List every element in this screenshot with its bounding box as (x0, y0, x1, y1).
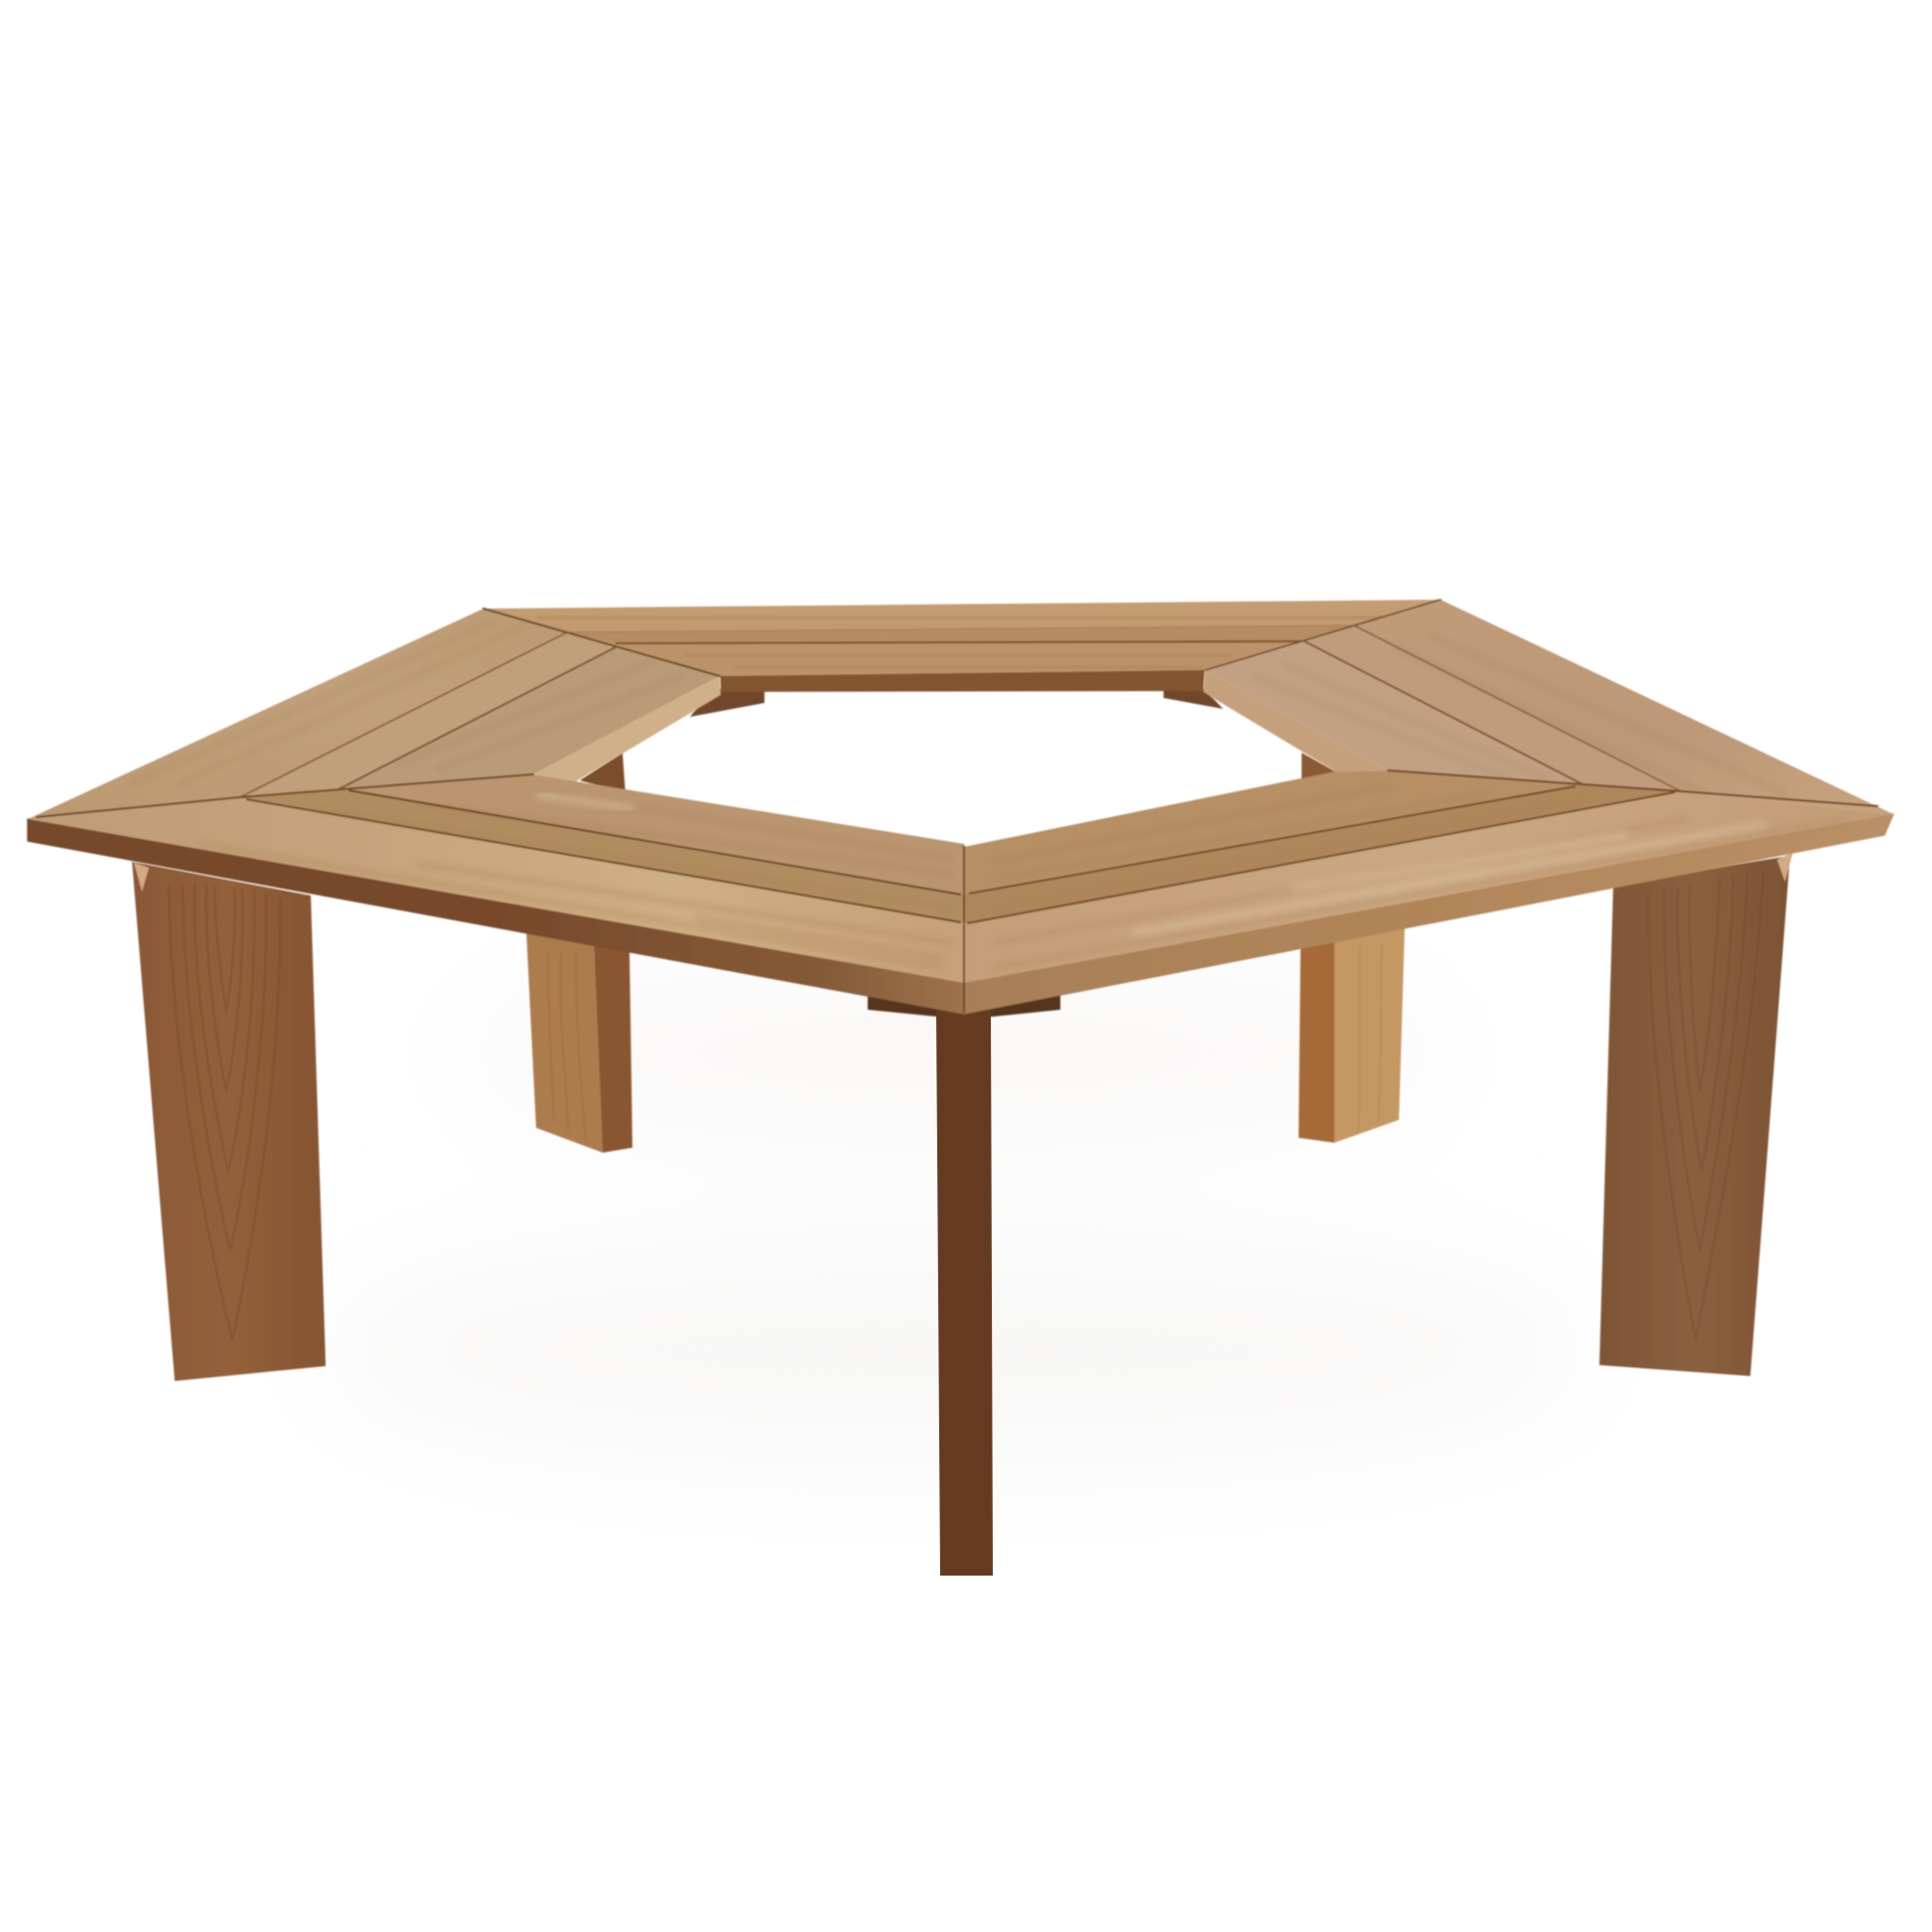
leg glimpsed through centre opening, right (1302, 753, 1337, 786)
right front rim (964, 814, 1893, 1014)
front centre leg (936, 1009, 993, 1576)
front right leg wood grain (1648, 872, 1763, 1340)
front right leg bracket (1777, 852, 1793, 882)
table top (28, 600, 1893, 1014)
inner support cleat left (690, 688, 764, 717)
front right section (964, 770, 1893, 983)
front left leg bracket (134, 863, 149, 892)
left front rim (28, 819, 964, 1014)
right section (1203, 600, 1893, 814)
back section (483, 600, 1441, 676)
front left leg (132, 862, 326, 1381)
front left section (28, 774, 964, 983)
left section (28, 609, 721, 819)
back left leg (526, 928, 632, 1153)
front left leg wood grain (169, 884, 280, 1340)
mitre joints (37, 600, 1877, 1013)
front support cleat (868, 978, 1060, 1017)
front right leg (1599, 852, 1793, 1376)
inner back rail edge (720, 666, 1205, 692)
back right leg (1299, 923, 1405, 1143)
floor shadow (318, 963, 1588, 1459)
inner support cleat right (1164, 688, 1223, 709)
leg glimpsed through centre opening, left (580, 753, 625, 794)
